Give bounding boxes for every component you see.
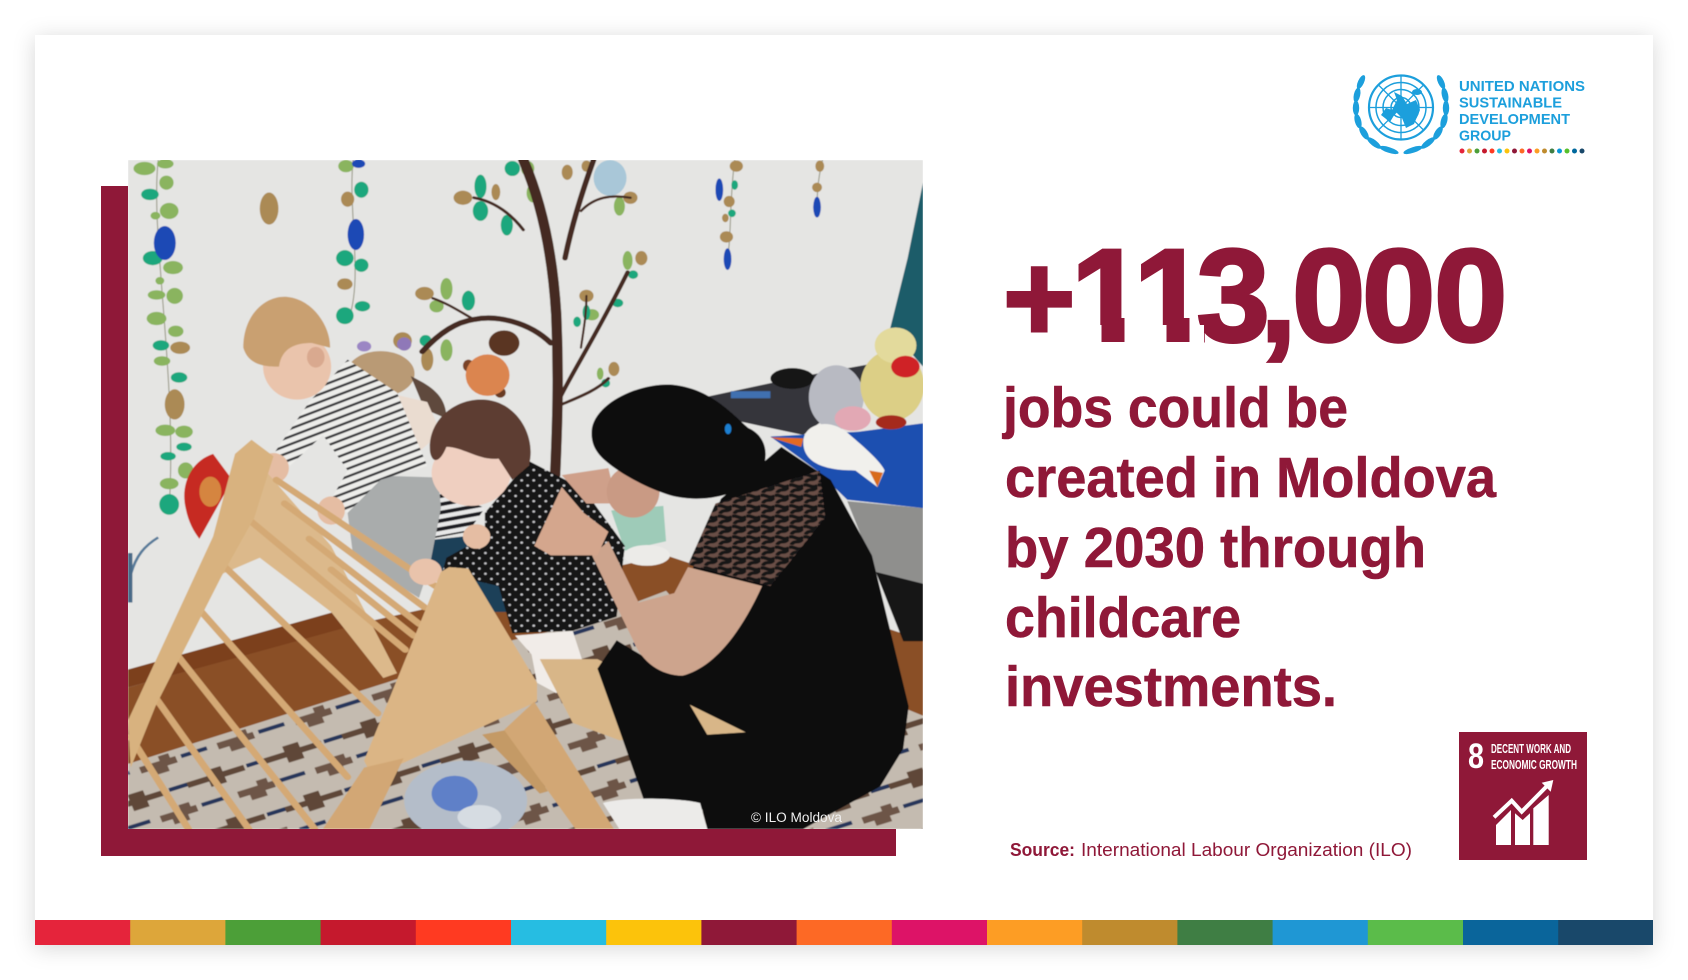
photo: children playing on a wooden climbing triangle with caregiver	[128, 160, 923, 829]
burgundy photo frame	[101, 186, 896, 856]
logo wordmark: GROUP	[1459, 128, 1511, 144]
UN emblem logo	[1352, 74, 1450, 156]
logo wordmark: UNITED NATIONS	[1459, 78, 1585, 95]
statement text	[1002, 376, 1497, 719]
SDG colour bar	[35, 920, 1653, 945]
logo SDG colour dots	[1460, 148, 1584, 154]
statement text: created in Moldova	[1005, 446, 1497, 510]
statement text: jobs could be	[1002, 376, 1348, 440]
source line: Source:	[1010, 839, 1075, 860]
headline number: 113,000	[1071, 222, 1507, 369]
statement text: childcare	[1005, 586, 1241, 650]
logo wordmark: SUSTAINABLE	[1459, 94, 1562, 112]
SDG 8 tile: DECENT WORK AND	[1491, 741, 1571, 756]
statement text: investments.	[1005, 655, 1337, 719]
SDG 8 tile	[1459, 732, 1587, 860]
headline number: +	[1003, 230, 1075, 368]
source line: International Labour Organization (ILO)	[1081, 839, 1412, 860]
photo credit: © ILO Moldova	[751, 810, 842, 825]
SDG 8 tile: 8	[1468, 737, 1484, 776]
logo wordmark: DEVELOPMENT	[1459, 111, 1570, 128]
icon: rising bars with arrow	[1494, 780, 1553, 845]
statement text: by 2030 through	[1005, 516, 1426, 580]
logo wordmark	[1459, 78, 1585, 144]
SDG 8 tile: ECONOMIC GROWTH	[1491, 757, 1577, 772]
